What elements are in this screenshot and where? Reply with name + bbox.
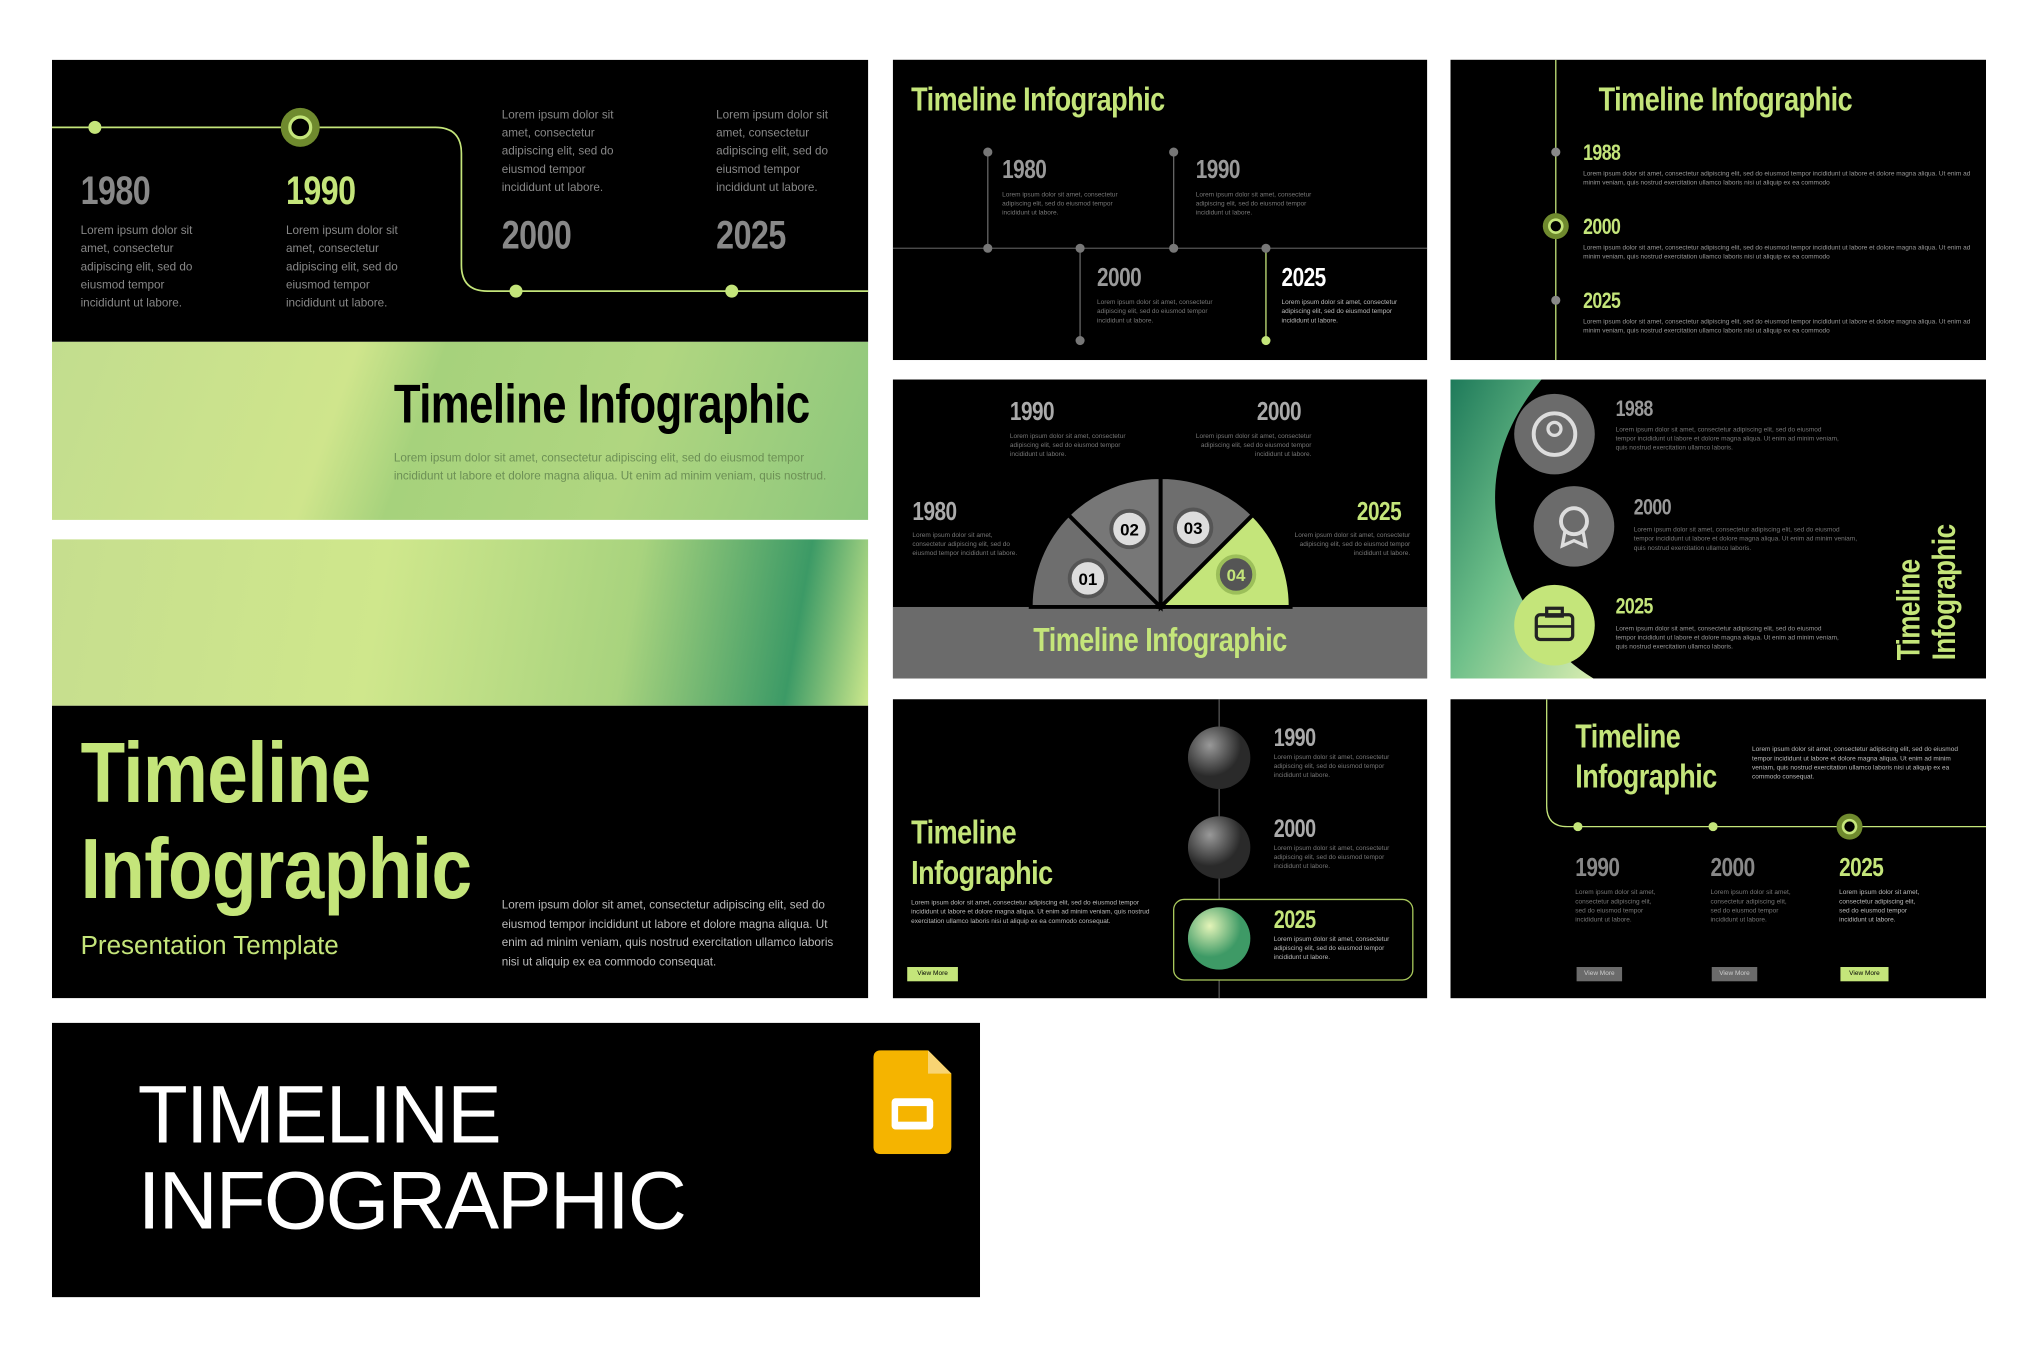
year 2025: Lorem ipsum dolor sit amet, consectetur adipiscing elit, sed do eiusmod tempor incididunt ut labore. — [716, 108, 828, 194]
year 2000: Lorem ipsum dolor sit amet, consectetur adipiscing elit, sed do eiusmod tempor incididunt ut labore. — [502, 108, 614, 194]
slide: semicircle: Lorem ipsum dolor sit amet, consectetur adipiscing elit, sed do eiusmod tempor incididunt ut labore. — [912, 532, 1017, 558]
slide: horizontal timeline with buttons: 1990 — [1575, 854, 1619, 883]
slide: vertical timeline: 1988 — [1583, 140, 1620, 165]
slide: spheres: Lorem ipsum dolor sit amet, consectetur adipiscing elit, sed do eiusmod tempor incididunt ut labore. — [1274, 936, 1389, 962]
year 1990: 1990 — [286, 168, 356, 213]
slide: horizontal timeline with buttons: Lorem ipsum dolor sit amet, consectetur adipiscing elit, sed do eiusmod tempor incididunt ut labore et dolore magna aliqua. Ut enim ad minim veniam, quis nostrud exercitation ullamco laboris nisi ut aliquip ex ea commodo consequat. — [1752, 746, 1958, 781]
slide: horizontal timeline with buttons: View More — [1584, 970, 1615, 977]
slide: semicircle: Lorem ipsum dolor sit amet, consectetur adipiscing elit, sed do eiusmod tempor incididunt ut labore. — [1196, 433, 1311, 459]
icon: google slides — [874, 1050, 952, 1154]
slide: vertical timeline: 2025 — [1583, 289, 1620, 313]
slide: icons: 1988 — [1616, 396, 1653, 421]
slide: horizontal timeline with buttons: Lorem ipsum dolor sit amet, consectetur adipiscing elit, sed do eiusmod tempor incididunt ut labore. — [1839, 889, 1919, 924]
slide: semicircle: Lorem ipsum dolor sit amet, consectetur adipiscing elit, sed do eiusmod tempor incididunt ut labore. — [1010, 433, 1125, 459]
slide: spheres: Timeline — [911, 812, 1016, 851]
panel: green title band — [52, 342, 868, 520]
panel: top timeline — [52, 60, 868, 342]
chart: semicircle sectors: 03 — [1184, 519, 1203, 538]
slide: spheres: Infographic — [911, 853, 1053, 892]
slide: timeline top/bottom: Lorem ipsum dolor sit amet, consectetur adipiscing elit, sed do eiusmod tempor incididunt ut labore. — [1097, 299, 1213, 325]
slide: vertical timeline — [1451, 60, 1986, 360]
title text: TIMELINE — [138, 1070, 500, 1161]
title text: INFOGRAPHIC — [138, 1155, 685, 1246]
slide: icons: 2000 — [1634, 495, 1671, 520]
slide: spheres: 1990 — [1274, 725, 1316, 753]
chart: semicircle sectors: 04 — [1227, 566, 1246, 585]
slide: spheres — [893, 699, 1427, 998]
panel: green title band: Lorem ipsum dolor sit amet, consectetur adipiscing elit, sed do eiusmod tempor incididunt ut labore et dolore magna aliqua. Ut enim ad minim veniam, quis nostrud. — [394, 451, 826, 482]
rotated title — [1891, 524, 1963, 660]
panel: top timeline: Lorem ipsum dolor sit amet, consectetur adipiscing elit, sed do eiusmod tempor incididunt ut labore. — [286, 224, 398, 309]
panel: green title band: Timeline Infographic — [394, 373, 810, 434]
panel: cover title: Presentation Template — [81, 932, 339, 961]
slide: timeline top/bottom: Lorem ipsum dolor sit amet, consectetur adipiscing elit, sed do eiusmod tempor incididunt ut labore. — [1196, 191, 1311, 217]
slide: icons: Lorem ipsum dolor sit amet, consectetur adipiscing elit, sed do eiusmod tempor incididunt ut labore et dolore magna aliqua. Ut enim ad minim veniam, quis nostrud exercitation ullamco laboris. — [1616, 426, 1839, 452]
chart: semicircle sectors: 02 — [1120, 520, 1139, 539]
panel: top timeline: Lorem ipsum dolor sit amet, consectetur adipiscing elit, sed do eiusmod tempor incididunt ut labore. — [81, 224, 192, 309]
timeline line — [52, 108, 868, 298]
slide: main cover — [52, 60, 868, 998]
slide: horizontal timeline with buttons: Infographic — [1575, 756, 1717, 795]
slide: timeline top/bottom: Lorem ipsum dolor sit amet, consectetur adipiscing elit, sed do eiusmod tempor incididunt ut labore. — [1002, 191, 1118, 217]
chart: semicircle sectors: 01 — [1078, 570, 1097, 589]
slide: spheres: Lorem ipsum dolor sit amet, consectetur adipiscing elit, sed do eiusmod tempor incididunt ut labore et dolore magna aliqua. Ut enim ad minim veniam, quis nostrud exercitation ullamco laboris nisi ut aliquip ex ea commodo consequat. — [911, 899, 1150, 925]
slide: horizontal timeline with buttons: 2000 — [1710, 854, 1755, 883]
slide: semicircle: 1980 — [912, 498, 957, 526]
slide: vertical timeline: Timeline Infographic — [1599, 79, 1852, 118]
panel: cover title: Lorem ipsum dolor sit amet, consectetur adipiscing elit, sed do eiusmod tempor incididunt ut labore et dolore magna aliqua. Ut enim ad minim veniam, quis nostrud exercitation ullamco laboris nisi ut aliquip ex ea commodo consequat. — [502, 898, 833, 968]
slide: vertical timeline: Lorem ipsum dolor sit amet, consectetur adipiscing elit, sed do eiusmod tempor incididunt ut labore et dolore magna aliqua. Ut enim ad minim veniam, quis nostrud exercitation ullamco laboris nisi ut aliquip ex ea commodo — [1583, 244, 1970, 261]
slide: horizontal timeline with buttons — [1451, 699, 1986, 998]
slide: horizontal timeline with buttons: 2025 — [1839, 854, 1883, 883]
slide: timeline top/bottom: 2000 — [1097, 264, 1141, 292]
slide: horizontal timeline with buttons: Lorem ipsum dolor sit amet, consectetur adipiscing elit, sed do eiusmod tempor incididunt ut labore. — [1710, 889, 1791, 924]
slide: vertical timeline: Lorem ipsum dolor sit amet, consectetur adipiscing elit, sed do eiusmod tempor incididunt ut labore et dolore magna aliqua. Ut enim ad minim veniam, quis nostrud exercitation ullamco laboris nisi ut aliquip ex ea commodo — [1583, 170, 1970, 187]
slide: semicircle — [893, 380, 1427, 678]
panel: top timeline: 2000 — [502, 212, 571, 257]
slide: timeline top/bottom: 2025 — [1282, 264, 1326, 292]
panel: cover title: Timeline — [81, 724, 371, 820]
slide: timeline top/bottom: 1980 — [1002, 156, 1046, 185]
panel: top timeline: 2025 — [716, 212, 786, 257]
slide: icons: Lorem ipsum dolor sit amet, consectetur adipiscing elit, sed do eiusmod tempor incididunt ut labore et dolore magna aliqua. Ut enim ad minim veniam, quis nostrud exercitation ullamco laboris. — [1634, 526, 1857, 552]
slide: semicircle: Lorem ipsum dolor sit amet, consectetur adipiscing elit, sed do eiusmod tempor incididunt ut labore. — [1295, 532, 1410, 558]
slide: timeline top/bottom — [893, 60, 1427, 360]
slide: semicircle: 2000 — [1257, 398, 1301, 426]
banner: bottom title — [52, 1023, 980, 1297]
slide: icons: Lorem ipsum dolor sit amet, consectetur adipiscing elit, sed do eiusmod tempor incididunt ut labore et dolore magna aliqua. Ut enim ad minim veniam, quis nostrud exercitation ullamco laboris. — [1616, 625, 1839, 651]
year 1980: 1980 — [81, 168, 150, 213]
slide: spheres: 2000 — [1274, 816, 1316, 844]
title text — [138, 1070, 685, 1246]
slide: semicircle: 1990 — [1010, 398, 1054, 426]
slide: semicircle: 2025 — [1357, 498, 1401, 526]
rotated title: Timeline — [1891, 559, 1928, 660]
slide: timeline top/bottom: Lorem ipsum dolor sit amet, consectetur adipiscing elit, sed do eiusmod tempor incididunt ut labore. — [1282, 299, 1397, 325]
slide: icons: 2025 — [1616, 594, 1653, 619]
slide: timeline top/bottom: Timeline Infographic — [911, 79, 1165, 118]
slide: horizontal timeline with buttons: View More — [1849, 970, 1880, 977]
slide: vertical timeline: 2000 — [1583, 214, 1620, 239]
slide: spheres: View More — [917, 970, 948, 977]
slide: horizontal timeline with buttons: Lorem ipsum dolor sit amet, consectetur adipiscing elit, sed do eiusmod tempor incididunt ut labore. — [1575, 889, 1655, 924]
slide: spheres: Lorem ipsum dolor sit amet, consectetur adipiscing elit, sed do eiusmod tempor incididunt ut labore. — [1274, 754, 1389, 780]
panel: green gradient band — [52, 539, 868, 706]
panel: cover title — [52, 706, 868, 998]
slide: horizontal timeline with buttons: Timeline — [1575, 716, 1680, 755]
chart: semicircle sectors — [1028, 479, 1293, 612]
slide: vertical timeline: Lorem ipsum dolor sit amet, consectetur adipiscing elit, sed do eiusmod tempor incididunt ut labore et dolore magna aliqua. Ut enim ad minim veniam, quis nostrud exercitation ullamco laboris nisi ut aliquip ex ea commodo — [1583, 318, 1970, 335]
rotated title: Infographic — [1926, 524, 1963, 660]
slide: horizontal timeline with buttons: View More — [1719, 970, 1750, 977]
slide: timeline top/bottom: 1990 — [1196, 156, 1240, 185]
slide: spheres: 2025 — [1274, 907, 1316, 935]
panel: cover title: Infographic — [81, 820, 471, 916]
slide: semicircle: Timeline Infographic — [1033, 620, 1287, 659]
slide: spheres: Lorem ipsum dolor sit amet, consectetur adipiscing elit, sed do eiusmod tempor incididunt ut labore. — [1274, 845, 1389, 871]
slide: icons — [1451, 380, 1986, 678]
